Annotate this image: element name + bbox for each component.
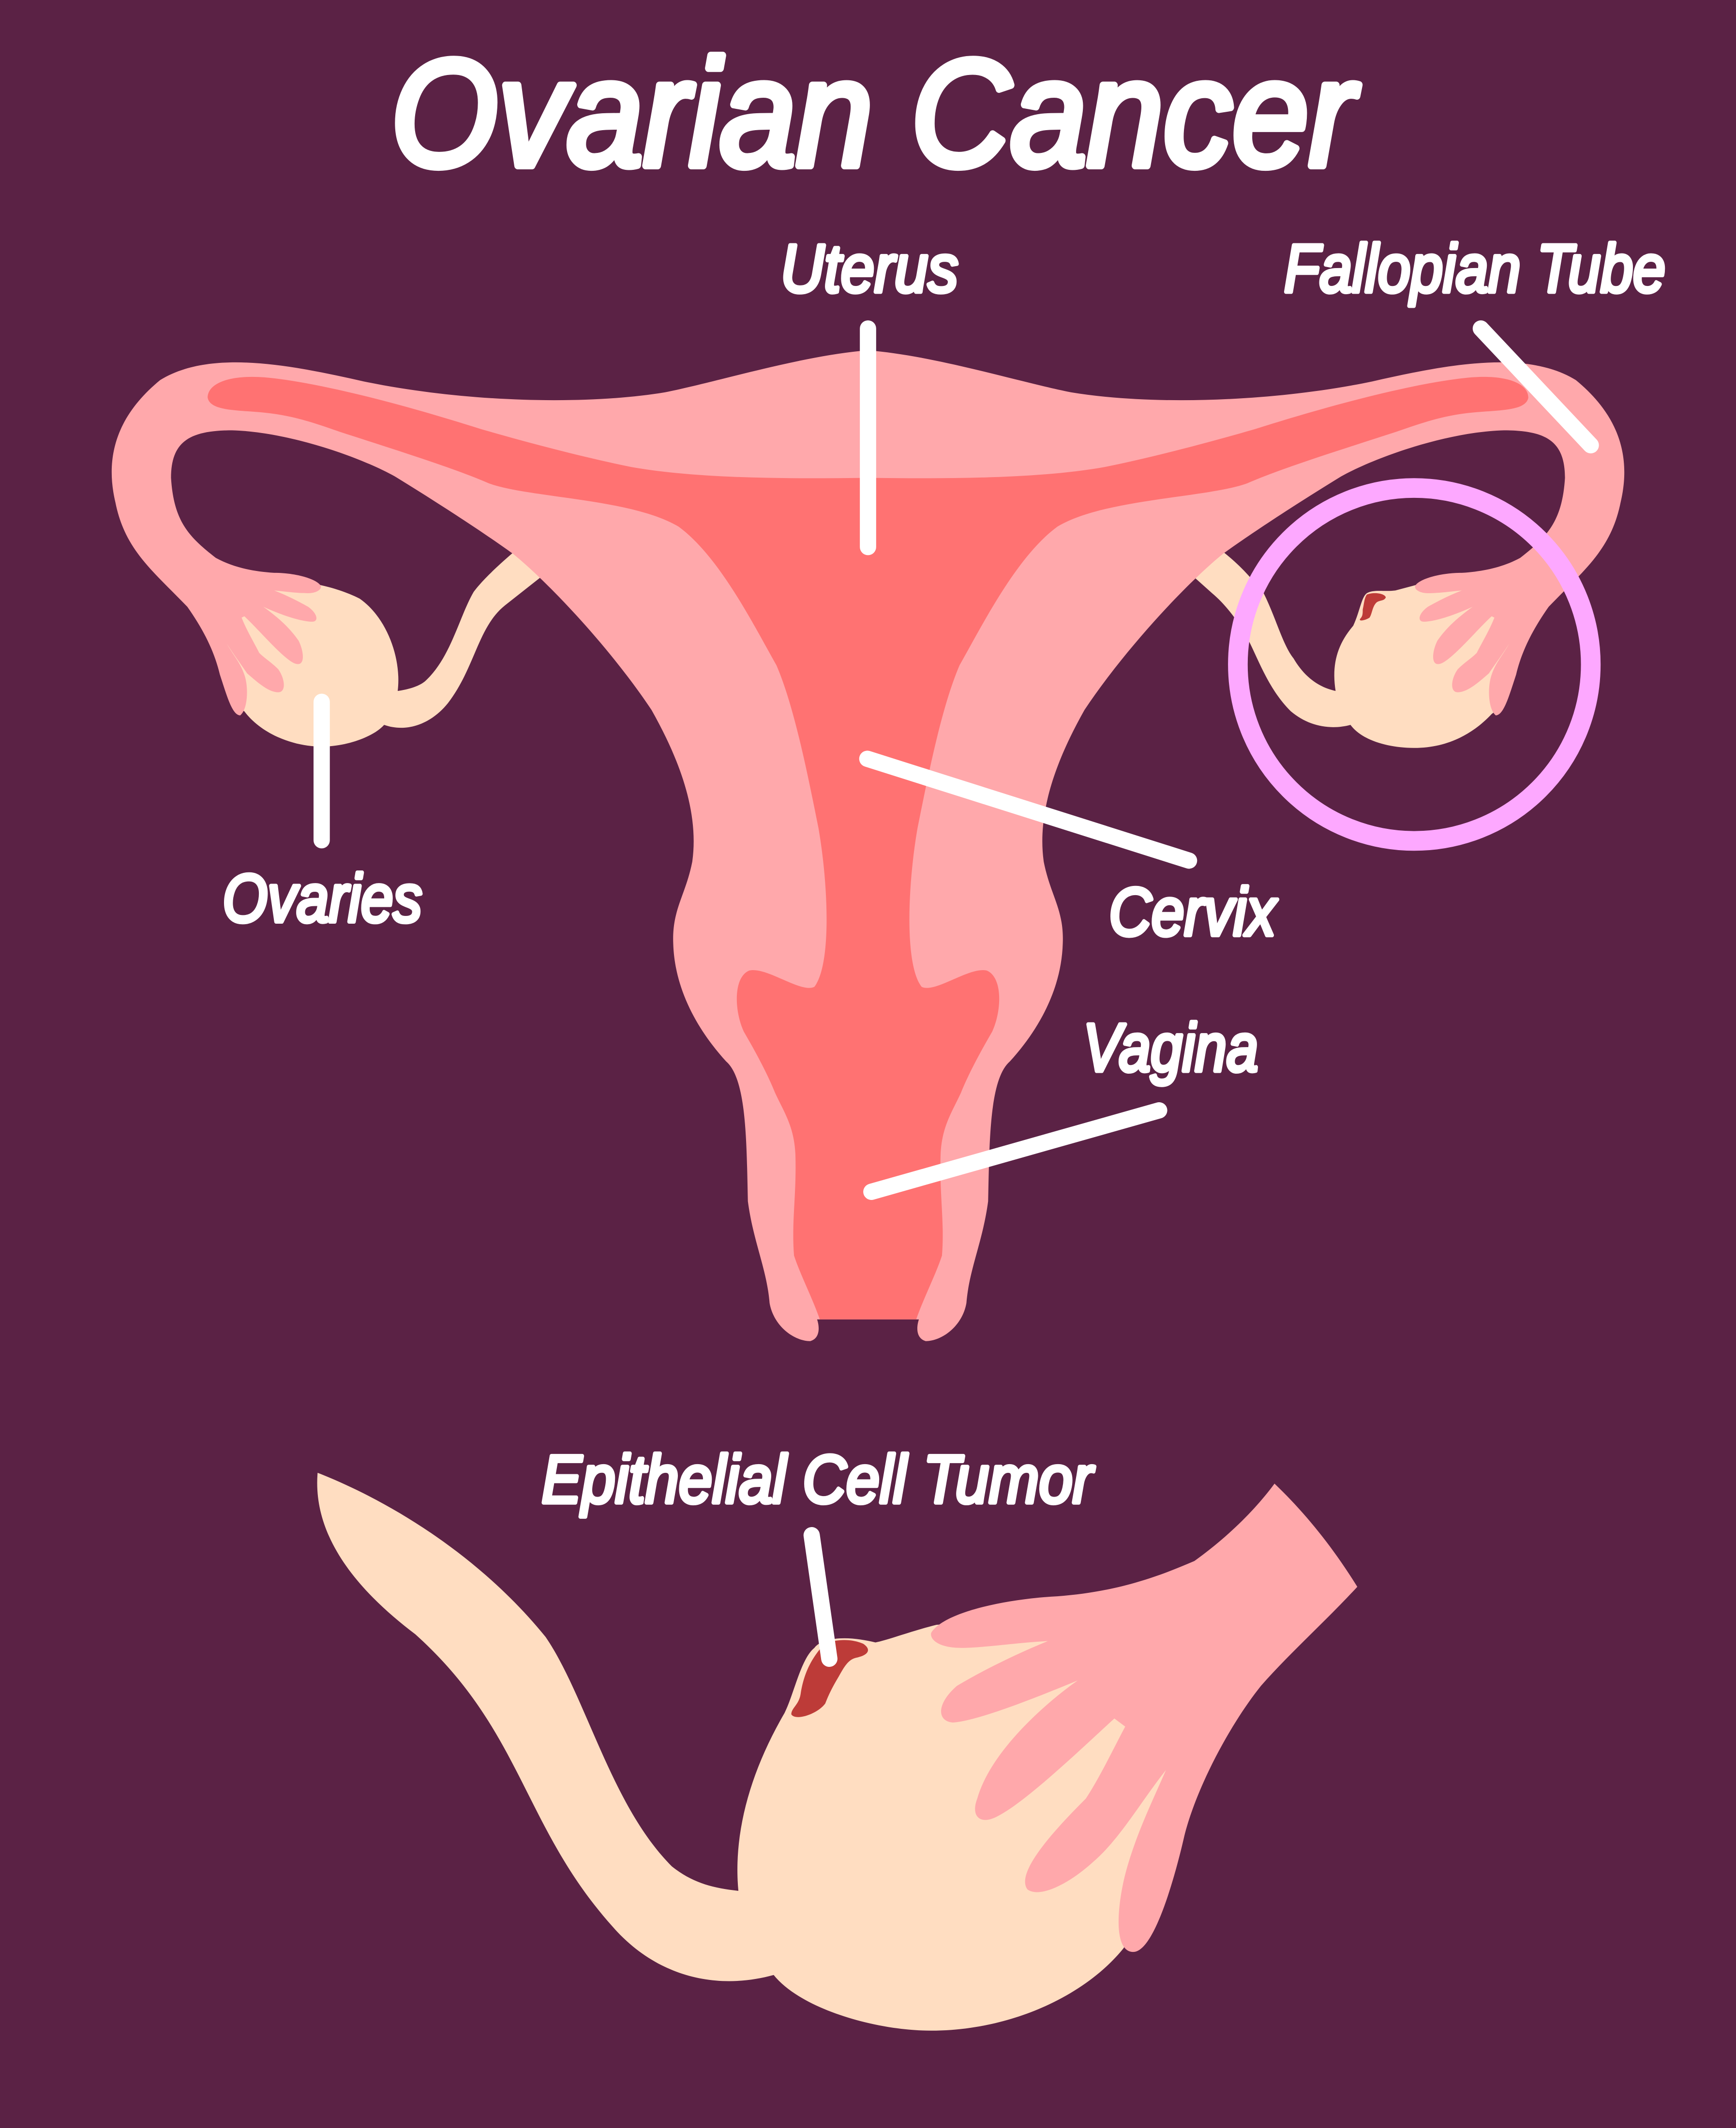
title: Ovarian Cancer: [391, 28, 1361, 198]
pointer: Fallopian Tube: [1481, 329, 1591, 445]
uterus and fallopian tubes outer shape: [112, 350, 1624, 1341]
label: Epithelial Cell Tumor: Epithelial Cell Tumor: [541, 1441, 1095, 1517]
enlarged ovary with ligament: [317, 1473, 1167, 2031]
uterine cavity and vaginal canal: [208, 377, 1528, 1319]
left ovary with ligament: [204, 546, 550, 747]
label: Vagina: Vagina: [1083, 1009, 1258, 1085]
highlight ring around right ovary: [1238, 488, 1591, 841]
pointer: Vagina: [871, 1110, 1159, 1192]
small tumor on right ovary: [1360, 593, 1386, 620]
label: Ovaries: Ovaries: [223, 860, 422, 936]
right half of cavity: [868, 377, 1528, 1319]
pointer: Uterus: [865, 329, 871, 547]
pointer: Cervix: [868, 759, 1189, 861]
pointer: Ovaries: [319, 702, 325, 840]
label: Uterus: Uterus: [780, 230, 958, 306]
right ovary with ligament: [1186, 546, 1532, 748]
enlarged fimbriae: [931, 1484, 1357, 1952]
left half of uterus, fallopian tube and fimbriae: [112, 350, 868, 1341]
pointer: Epithelial Cell Tumor: [812, 1535, 829, 1659]
right half of uterus, fallopian tube and fimbriae: [868, 350, 1624, 1341]
label: Fallopian Tube: Fallopian Tube: [1284, 230, 1665, 306]
label: Cervix: Cervix: [1109, 874, 1278, 950]
left half of cavity: [208, 377, 868, 1319]
enlarged epithelial tumor: [791, 1640, 868, 1717]
